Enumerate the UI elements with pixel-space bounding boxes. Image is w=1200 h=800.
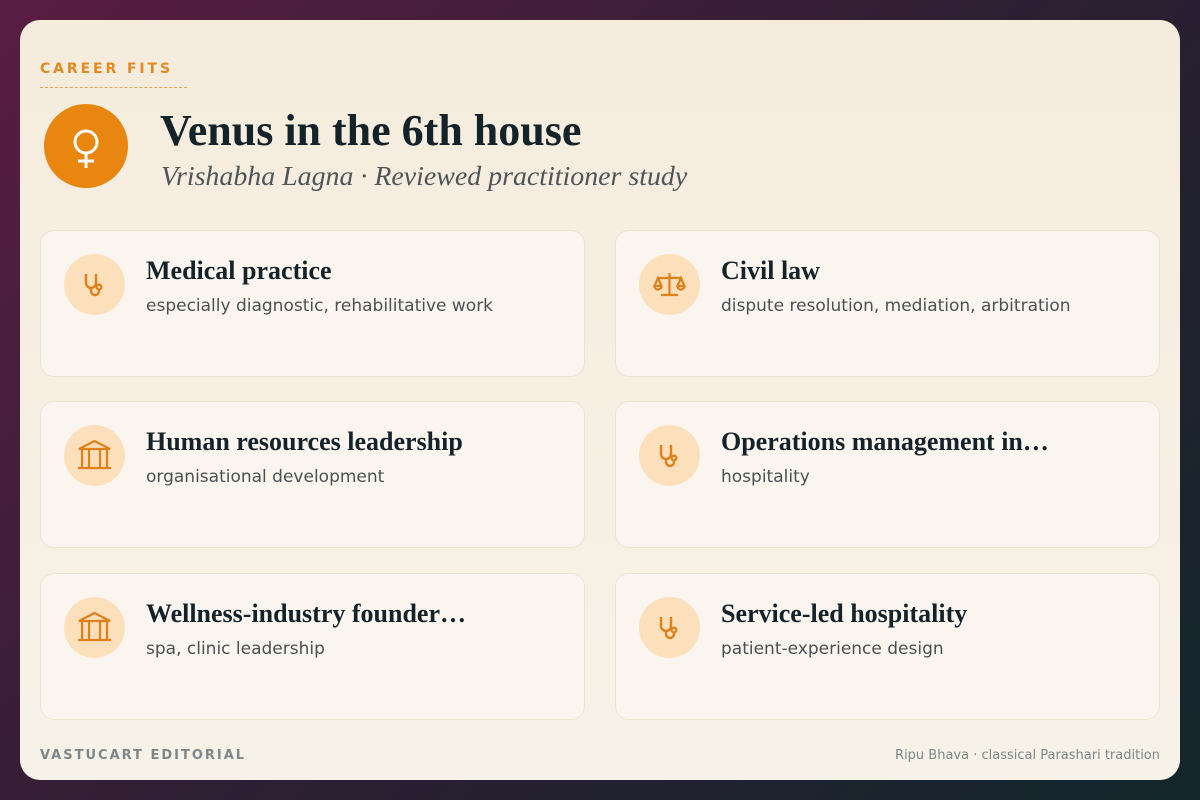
card: wellness founder: Wellness-industry founder…	[146, 599, 466, 628]
card: operations management: hospitality	[721, 467, 810, 487]
title: Venus in the 6th house	[160, 106, 581, 155]
card: human resources: organisational development	[146, 467, 384, 487]
icon: stethoscope	[64, 254, 125, 315]
kicker label: CAREER FITS	[40, 61, 173, 77]
card: civil law	[615, 230, 1160, 377]
footer: brand: VASTUCART EDITORIAL	[40, 748, 246, 763]
card: human resources	[40, 401, 585, 548]
card: wellness founder	[40, 573, 585, 720]
icon: institution	[64, 597, 125, 658]
card: civil law: dispute resolution, mediation, arbitration	[721, 296, 1071, 316]
footer: source: Ripu Bhava · classical Parashari tradition	[895, 748, 1160, 763]
kicker label	[40, 61, 187, 88]
card: medical practice: Medical practice	[146, 256, 332, 285]
card: operations management	[615, 401, 1160, 548]
icon: scales	[639, 254, 700, 315]
icon: institution	[64, 425, 125, 486]
card: service-led hospitality: Service-led hospitality	[721, 599, 967, 628]
icon: stethoscope	[639, 597, 700, 658]
subtitle: Vrishabha Lagna · Reviewed practitioner study	[161, 161, 687, 192]
card: service-led hospitality: patient-experience design	[721, 639, 944, 659]
card: operations management: Operations management in…	[721, 427, 1049, 456]
card: human resources: Human resources leadership	[146, 427, 463, 456]
icon: stethoscope	[639, 425, 700, 486]
card: medical practice	[40, 230, 585, 377]
card: service-led hospitality	[615, 573, 1160, 720]
card: civil law: Civil law	[721, 256, 820, 285]
card: medical practice: especially diagnostic, rehabilitative work	[146, 296, 493, 316]
card: wellness founder: spa, clinic leadership	[146, 639, 325, 659]
icon: venus badge	[44, 104, 128, 188]
